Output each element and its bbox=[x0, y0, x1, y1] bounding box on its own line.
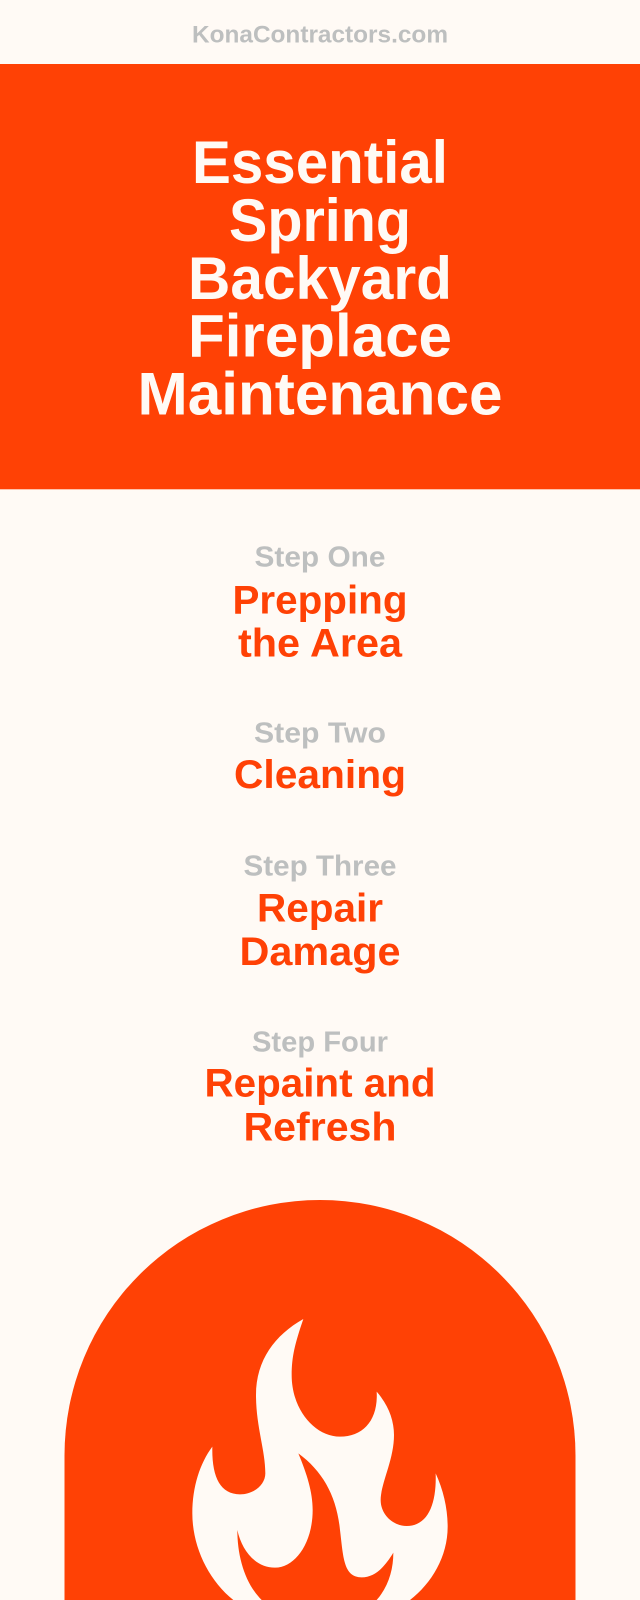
title: Backyard bbox=[188, 245, 452, 312]
step four: Refresh bbox=[244, 1106, 396, 1150]
title: Spring bbox=[229, 187, 411, 254]
step two: Cleaning bbox=[234, 753, 406, 797]
title banner bbox=[0, 64, 640, 489]
step three: Repair bbox=[257, 886, 383, 930]
fireplace arch with flame icon bbox=[64, 1200, 576, 1600]
step two bbox=[234, 718, 406, 797]
title: Essential bbox=[192, 129, 448, 196]
step four bbox=[204, 1026, 436, 1150]
step two: Step Two bbox=[254, 718, 386, 750]
step three bbox=[240, 850, 400, 974]
step one bbox=[232, 542, 408, 666]
step one: Prepping bbox=[232, 578, 408, 622]
step one: Step One bbox=[254, 542, 386, 574]
title: Fireplace bbox=[188, 303, 452, 370]
title: Maintenance bbox=[138, 360, 503, 427]
step three: Damage bbox=[240, 930, 400, 974]
icon: flame bbox=[192, 1319, 448, 1600]
website name: KonaContractors.com bbox=[192, 22, 448, 49]
step three: Step Three bbox=[244, 850, 396, 882]
title bbox=[138, 129, 503, 427]
step four: Step Four bbox=[252, 1026, 388, 1058]
step four: Repaint and bbox=[204, 1062, 436, 1106]
step one: the Area bbox=[238, 622, 403, 666]
